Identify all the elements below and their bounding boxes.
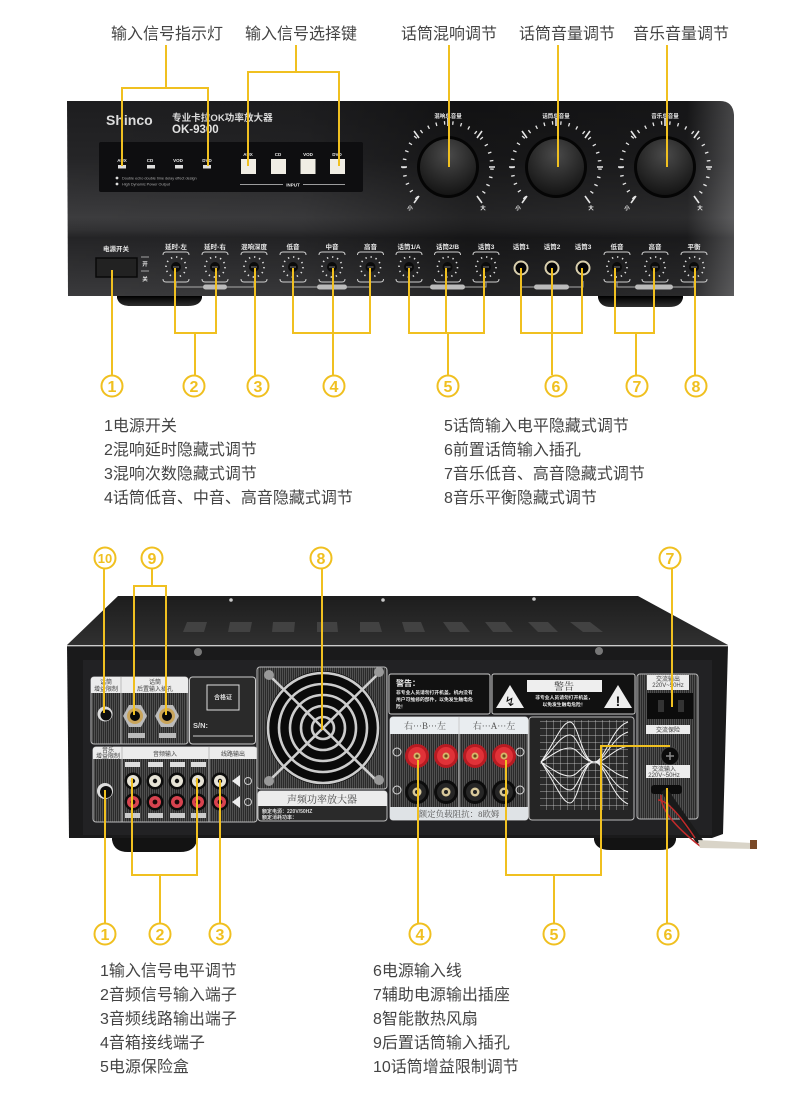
panel: warning text: 险！ xyxy=(396,703,406,710)
hidden adjustment knobs: 延时-左 xyxy=(165,242,187,251)
rear legend left: 2音频信号输入端子 xyxy=(100,986,237,1004)
front legend right xyxy=(444,417,645,507)
front number badges: 7 xyxy=(633,379,642,396)
top screws xyxy=(194,597,603,656)
model number: OK-9300 xyxy=(172,124,219,136)
power switch: 开 xyxy=(142,261,148,268)
panel: audio inputs and outputs: 音频输入 xyxy=(153,750,177,758)
top labels xyxy=(111,25,729,43)
rear legend left: 4音箱接线端子 xyxy=(100,1034,205,1052)
rear legend left: 3音频线路输出端子 xyxy=(100,1010,237,1028)
front legend right: 6前置话筒输入插孔 xyxy=(444,441,581,459)
hidden adjustment knobs: 平衡 xyxy=(688,242,701,251)
hidden adjustment knobs xyxy=(163,242,707,290)
right rear foot xyxy=(594,836,676,850)
mic volume dial: 小 xyxy=(515,204,521,212)
front number badges: 3 xyxy=(254,379,263,396)
input select buttons: DVD xyxy=(332,152,342,157)
panel: power section: 220V~50Hz xyxy=(652,683,684,689)
panel: warning symbols xyxy=(492,674,635,714)
indicator lights xyxy=(117,158,212,168)
hidden adjustment knobs: 话筒3 xyxy=(575,242,592,251)
rear number badges: 7 xyxy=(666,551,675,568)
panel: warning symbols: 警告 xyxy=(554,680,574,693)
front number badges: 8 xyxy=(692,379,701,396)
rear face xyxy=(67,646,728,838)
chassis shading xyxy=(67,101,734,296)
front number badges xyxy=(102,376,706,396)
hidden adjustment knobs: 话筒2 xyxy=(544,242,561,251)
power switch xyxy=(96,244,149,283)
front chassis xyxy=(67,101,734,296)
panel: power section: 220V~50Hz xyxy=(648,773,680,779)
music volume dial xyxy=(618,112,712,212)
input select buttons xyxy=(240,152,345,188)
rear number badges xyxy=(94,548,680,944)
echo volume dial xyxy=(401,112,495,212)
panel: warning text: 用户可维修的部件，以免发生触电危 xyxy=(396,696,473,703)
panel: mic gain and rear mic jacks: 增益限制 xyxy=(94,685,118,693)
top vents xyxy=(183,622,603,632)
panel: audio inputs and outputs: 增益限制 xyxy=(96,752,120,760)
rear number badges: 6 xyxy=(664,927,673,944)
rear legend right: 8智能散热风扇 xyxy=(373,1010,478,1028)
front legend left: 3混响次数隐藏式调节 xyxy=(104,465,257,483)
rear number badges: 9 xyxy=(148,551,157,568)
label: input select: 输入信号选择键 xyxy=(245,25,357,43)
hidden adjustment knobs: 话筒2/B xyxy=(436,242,459,251)
panel: audio inputs and outputs xyxy=(93,746,257,822)
panel: mic gain and rear mic jacks xyxy=(91,677,188,744)
panel: audio inputs and outputs: 线路输出 xyxy=(221,750,245,758)
panel: product plate: 额定消耗功率： xyxy=(262,814,297,821)
front number badges: 2 xyxy=(190,379,199,396)
rear legend left: 1输入信号电平调节 xyxy=(100,962,237,980)
front legend right: 5话筒输入电平隐藏式调节 xyxy=(444,417,629,435)
input select buttons: VOD xyxy=(303,152,314,157)
input select buttons: INPUT xyxy=(286,182,300,188)
panel: certificate xyxy=(190,677,256,744)
panel: warning text: 警告： xyxy=(396,678,420,688)
rear legend right: 7辅助电源输出插座 xyxy=(373,986,510,1004)
echo volume dial: 混响总音量 xyxy=(434,112,462,120)
panel: mic gain and rear mic jacks: 后置输入插孔 xyxy=(137,685,173,693)
left rear foot xyxy=(112,836,197,852)
panel: warning text: 非专业人员请勿打开机盖。机内没有 xyxy=(396,689,473,696)
hidden adjustment knobs: 高音 xyxy=(364,242,378,251)
rear number badges: 3 xyxy=(216,927,225,944)
right foot xyxy=(598,296,683,307)
panel: power section: 交流保险 xyxy=(656,726,680,734)
rear number badges: 2 xyxy=(156,927,165,944)
rear legend right: 10话筒增益限制调节 xyxy=(373,1058,519,1076)
microphone input jacks xyxy=(514,262,590,274)
label: input indicator: 输入信号指示灯 xyxy=(111,25,223,43)
front legend right: 7音乐低音、高音隐藏式调节 xyxy=(444,465,645,483)
front legend right: 8音乐平衡隐藏式调节 xyxy=(444,489,597,507)
panel: cooling fan xyxy=(257,667,387,789)
front number badges: 5 xyxy=(444,379,453,396)
panel: speaker terminals xyxy=(390,717,528,820)
hidden adjustment knobs: 低音 xyxy=(286,242,300,251)
panel: power section xyxy=(637,674,698,819)
front number badges: 1 xyxy=(108,379,117,396)
display window xyxy=(99,142,363,192)
rear number badges: 8 xyxy=(317,551,326,568)
hidden adjustment knobs: 中音 xyxy=(326,242,339,251)
input select buttons: AUX xyxy=(243,152,253,157)
panel: mic gain and rear mic jacks: 话筒 xyxy=(149,678,161,686)
product title: 专业卡拉OK功率放大器 xyxy=(172,112,273,124)
feature notes: High Dynamic Power Output xyxy=(122,182,171,186)
front amplifier photo xyxy=(67,101,734,307)
rear number badges: 5 xyxy=(550,927,559,944)
music volume dial: 小 xyxy=(624,204,630,212)
feature notes: Double echo double time delay effect design xyxy=(122,176,197,180)
panel: warning text xyxy=(389,674,490,714)
rear number badges: 4 xyxy=(416,927,425,944)
label: mic volume: 话筒音量调节 xyxy=(519,25,615,43)
panel: product plate: 声频功率放大器 xyxy=(287,793,357,806)
hidden adjustment knobs: 话筒1 xyxy=(513,242,530,251)
panel: warning symbols: 非专业人员请勿打开机盖， xyxy=(535,694,593,701)
label: echo: 话筒混响调节 xyxy=(401,25,497,43)
power switch: 电源开关 xyxy=(103,244,130,253)
rear inset xyxy=(83,660,712,835)
panel: warning symbols: ! xyxy=(616,693,620,709)
hidden adjustment knobs: 延时-右 xyxy=(204,242,226,251)
front legend left xyxy=(104,417,353,507)
rear number badges: 10 xyxy=(98,551,112,566)
hidden adjustment knobs: 低音 xyxy=(610,242,624,251)
echo volume dial: 小 xyxy=(407,204,413,212)
label: music volume: 音乐音量调节 xyxy=(633,25,729,43)
mic volume dial: 大 xyxy=(588,204,594,212)
rear number badges: 1 xyxy=(101,927,110,944)
rear legend left xyxy=(100,962,237,1076)
power switch: 关 xyxy=(142,275,148,283)
panel: mic gain and rear mic jacks: 话筒 xyxy=(100,678,112,686)
rear legend left: 5电源保险盒 xyxy=(100,1058,189,1076)
panel: power section: 交流输出 xyxy=(656,675,680,683)
mic volume dial xyxy=(509,112,603,212)
front legend left: 2混响延时隐藏式调节 xyxy=(104,441,257,459)
rear legend right: 6电源输入线 xyxy=(373,962,462,980)
rear leader lines xyxy=(104,569,672,923)
panel: power section: 交流输入 xyxy=(652,765,676,773)
indicator lights: VOD xyxy=(173,158,184,163)
music volume dial: 音乐总音量 xyxy=(651,112,679,120)
panel: speaker terminals: 右···B···左 xyxy=(404,720,446,731)
hidden adjustment knobs: 混响深度 xyxy=(241,242,268,251)
panel: certificate: 合格证 xyxy=(214,694,232,702)
input select buttons: CD xyxy=(275,152,282,157)
panel: speaker terminals: 右···A···左 xyxy=(473,720,515,731)
front leader lines xyxy=(112,45,695,375)
panel: product plate: 额定电源：220V/50HZ xyxy=(262,808,312,815)
panel: warning symbols: ↯ xyxy=(505,694,515,709)
rear legend right xyxy=(373,962,519,1076)
panel: warning symbols: 以免发生触电危险！ xyxy=(542,701,586,708)
echo volume dial: 大 xyxy=(480,204,486,212)
panel: speaker terminals: 额定负载阻抗：8欧姆 xyxy=(419,809,500,819)
indicator lights: CD xyxy=(147,158,154,163)
hidden adjustment knobs: 话筒1/A xyxy=(397,242,421,251)
brand logo: Shinco xyxy=(106,112,153,128)
front legend left: 1电源开关 xyxy=(104,417,177,435)
hidden adjustment knobs: 话筒3 xyxy=(478,242,495,251)
indicator lights: AUX xyxy=(117,158,127,163)
top cover xyxy=(67,596,728,645)
panel: certificate: S/N: xyxy=(193,721,208,730)
feature notes xyxy=(116,176,197,186)
power cable xyxy=(658,790,757,849)
hidden adjustment knobs: 高音 xyxy=(648,242,662,251)
indicator lights: DVD xyxy=(202,158,212,163)
rear amplifier photo xyxy=(67,596,757,852)
panel: audio inputs and outputs: 音乐 xyxy=(102,746,114,754)
panel: product plate xyxy=(258,791,387,821)
panel: frequency response chart xyxy=(529,717,634,820)
rear legend right: 9后置话筒输入插孔 xyxy=(373,1034,510,1052)
left foot xyxy=(117,296,202,306)
front legend left: 4话筒低音、中音、高音隐藏式调节 xyxy=(104,489,353,507)
front number badges: 4 xyxy=(330,379,339,396)
mic volume dial: 话筒总音量 xyxy=(542,112,570,120)
front number badges: 6 xyxy=(552,379,561,396)
music volume dial: 大 xyxy=(697,204,703,212)
